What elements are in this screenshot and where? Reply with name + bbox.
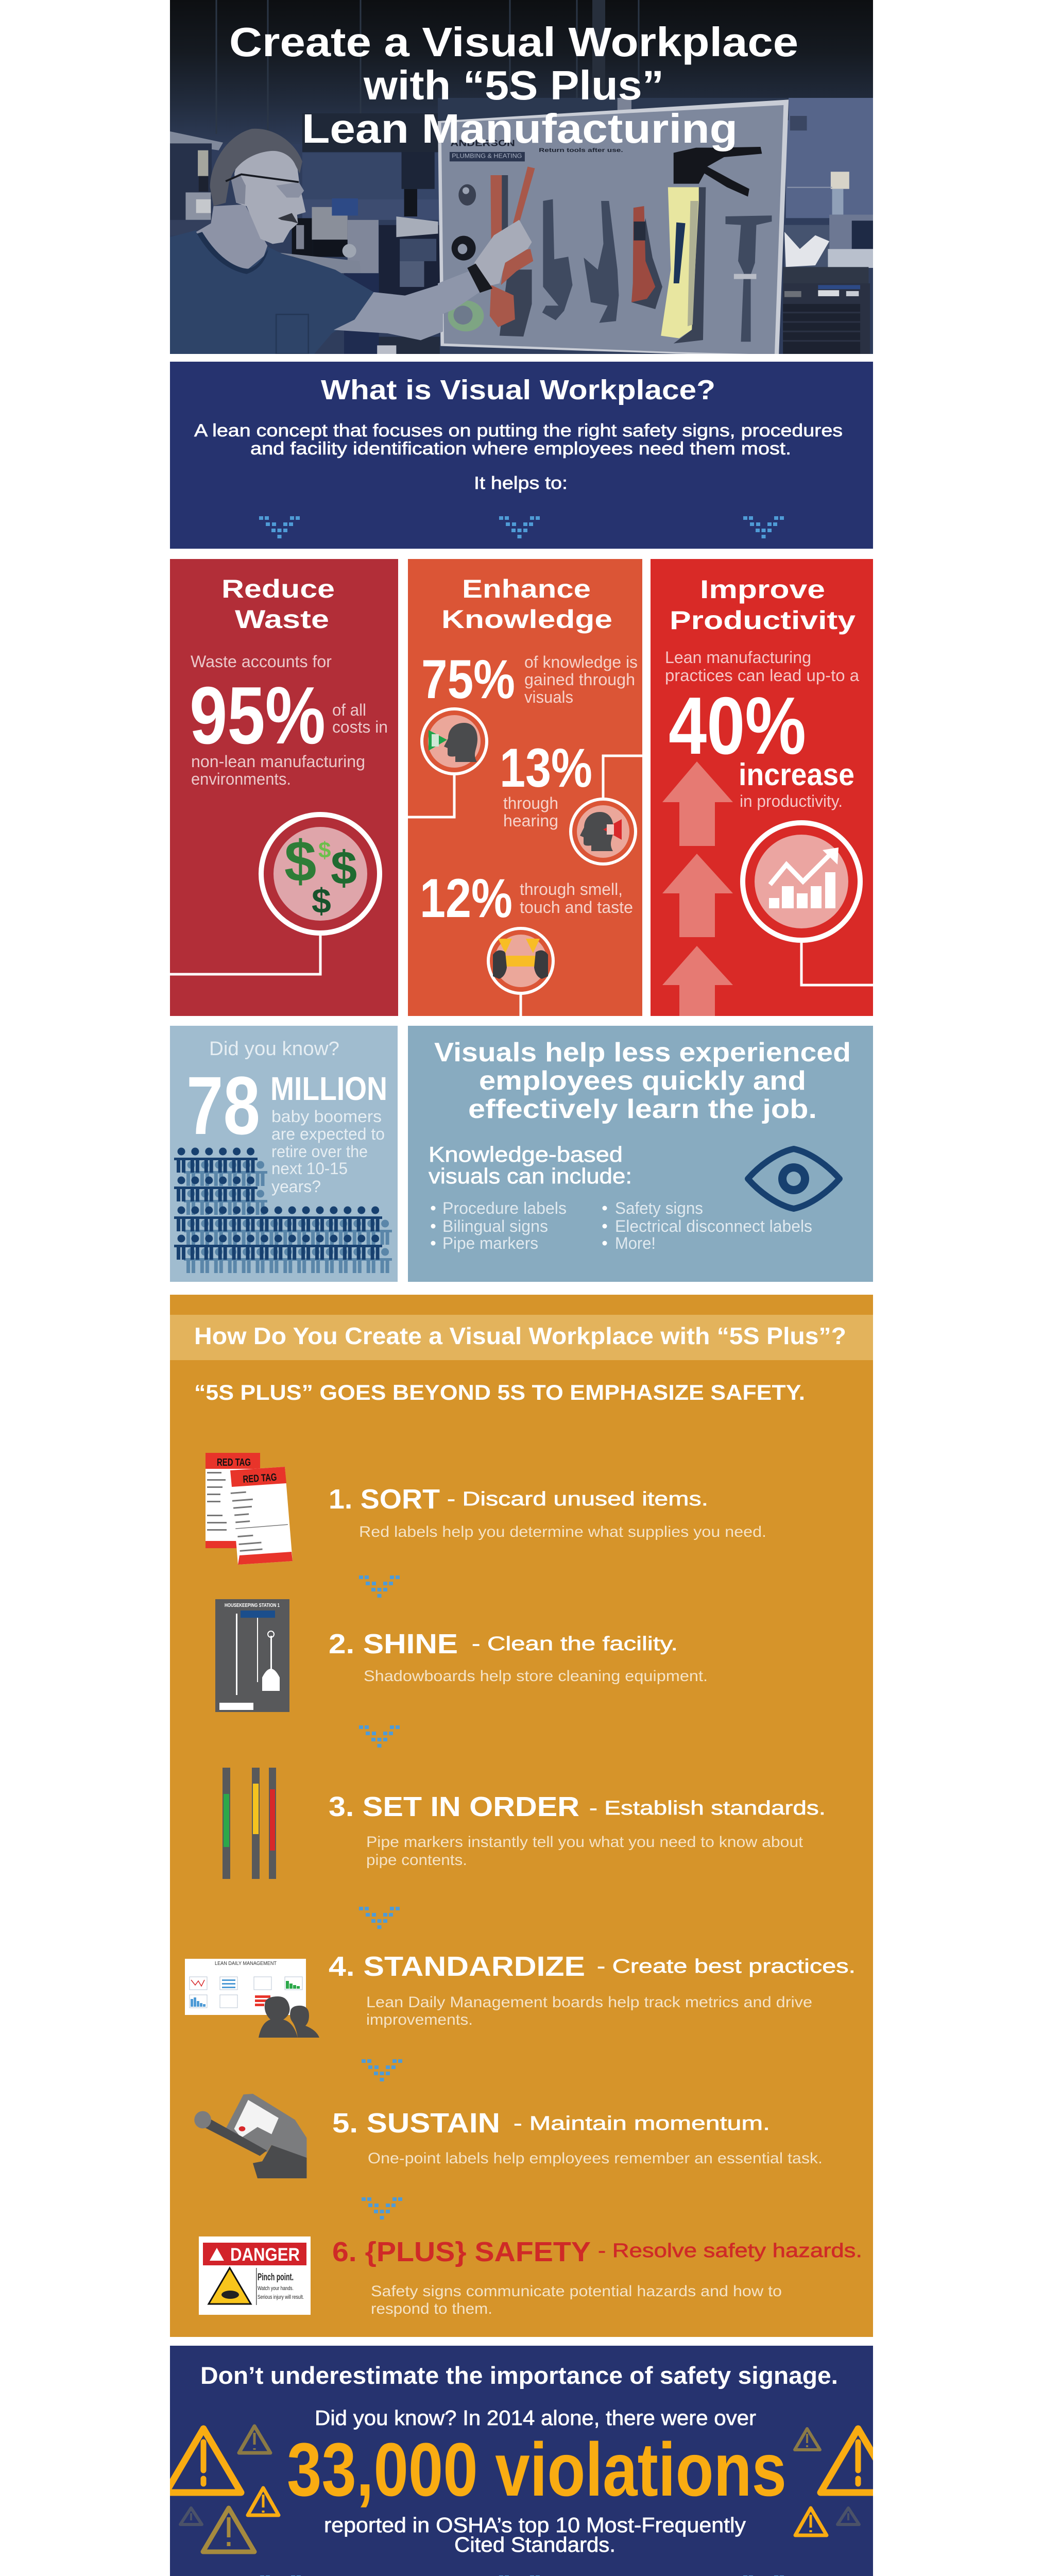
definition text: and facility identification where employees need them most. (250, 439, 791, 459)
step 4: improvements. (366, 2011, 473, 2028)
chevron (359, 1907, 400, 1929)
icon: eye (748, 1149, 840, 1209)
step 3 (329, 1791, 826, 1869)
icon: dollar signs (261, 815, 380, 933)
step 1: - Discard unused items. (447, 1488, 708, 1510)
icon: shadowboard (215, 1599, 289, 1712)
heading: Improve (700, 575, 825, 604)
heading: effectively learn the job. (468, 1094, 817, 1124)
heading band (170, 1315, 873, 1360)
step 2: Shadowboards help store cleaning equipment. (364, 1668, 708, 1685)
icon: danger sign: Pinch point. (258, 2272, 294, 2283)
step 1: 1. SORT (329, 1484, 440, 1515)
connector (170, 936, 320, 974)
icon: pipe markers (223, 1768, 276, 1879)
stat 75%: 75% (421, 648, 515, 710)
chevrons (260, 2575, 784, 2576)
icon: lean daily management board (185, 1959, 319, 2038)
bullet list: Bilingual signs (442, 1217, 548, 1235)
step 4 (329, 1951, 856, 2028)
chevron (359, 1725, 400, 1748)
waste text: environments. (191, 770, 291, 788)
step 6: respond to them. (371, 2300, 492, 2317)
shadowboard with tools: Return tools after use. (539, 147, 623, 154)
baby boomers text: next 10-15 (271, 1159, 348, 1178)
heading: What is Visual Workplace? (321, 375, 715, 405)
heading (670, 575, 856, 635)
icon: red tags (206, 1453, 293, 1565)
icon: danger sign: Watch your hands. (258, 2285, 294, 2292)
title (229, 19, 798, 151)
panel: enhance knowledge (408, 559, 642, 1016)
icon: danger sign: DANGER (230, 2245, 300, 2265)
worker (170, 129, 443, 355)
heading: Knowledge (441, 605, 612, 634)
waste text (191, 652, 388, 788)
panel: reduce waste (170, 559, 398, 1016)
icon: danger sign (199, 2236, 311, 2315)
warning triangles (166, 2426, 896, 2552)
connectors (408, 756, 642, 1016)
waste text: non-lean manufacturing (191, 752, 365, 771)
icon: dollar signs: $ (312, 882, 331, 921)
it helps to: It helps to: (474, 473, 568, 493)
heading: Don’t underestimate the importance of safety signage. (200, 2362, 838, 2389)
icon: red tags: RED TAG (217, 1457, 251, 1468)
baby boomers text: retire over the (271, 1142, 368, 1161)
stat 12%: 12% (420, 867, 512, 929)
heading band: How Do You Create a Visual Workplace with “5S Plus”? (194, 1323, 846, 1349)
heading: Waste (235, 605, 329, 634)
connector (801, 943, 873, 985)
step 3: 3. SET IN ORDER (329, 1791, 579, 1822)
productivity text (665, 648, 859, 685)
did you know text: Did you know? In 2014 alone, there were over (315, 2406, 756, 2430)
subheading: “5S PLUS” GOES BEYOND 5S TO EMPHASIZE SAFETY. (194, 1380, 805, 1404)
icon: dollar signs: $ (284, 829, 316, 893)
heading: employees quickly and (479, 1066, 806, 1096)
panel: what is visual workplace (170, 362, 873, 549)
title: with “5S Plus” (363, 62, 664, 108)
heading (434, 1038, 851, 1124)
baby boomers text (271, 1107, 385, 1196)
shadowboard with tools (438, 99, 789, 355)
subheading: visuals can include: (429, 1164, 632, 1188)
step 4: 4. STANDARDIZE (329, 1951, 585, 1982)
heading: Reduce (221, 574, 335, 603)
icon: crowd of workers (174, 1147, 392, 1273)
text 12%: touch and taste (520, 898, 633, 917)
background of workshop, left (170, 113, 441, 354)
heading: Productivity (670, 606, 856, 635)
text 13% (503, 794, 558, 830)
step 4: Lean Daily Management boards help track metrics and drive (366, 1994, 812, 2011)
panel: safety signage violations (166, 2346, 896, 2576)
photo: worker at tool shadowboard (170, 0, 876, 355)
icon: hearing (571, 799, 636, 864)
heading: Visuals help less experienced (434, 1038, 851, 1067)
panel: improve productivity (651, 559, 873, 1016)
definition text (194, 421, 843, 459)
header: photo banner (170, 0, 876, 355)
step 5: - Maintain momentum. (514, 2113, 770, 2134)
icon: dollar signs: $ (318, 838, 331, 863)
increase (739, 757, 854, 810)
heading (441, 574, 612, 634)
bullet list: Pipe markers (442, 1234, 538, 1252)
step 4: - Create best practices. (597, 1956, 856, 1977)
icon: sight (422, 709, 487, 774)
text 13%: through (503, 794, 558, 812)
subheading (429, 1142, 632, 1188)
chevron (359, 1575, 400, 1598)
osha text: reported in OSHA’s top 10 Most-Frequently (324, 2513, 746, 2537)
step 6: Safety signs communicate potential hazards and how to (371, 2283, 782, 2300)
text 75%: of knowledge is (524, 653, 638, 671)
step 6: - Resolve safety hazards. (598, 2240, 862, 2262)
step 5 (332, 2108, 823, 2167)
panel: how do you create a visual workplace (170, 1295, 873, 2337)
icon: danger sign: Serious injury will result. (258, 2294, 304, 2300)
text 12% (520, 880, 633, 917)
osha text: Cited Standards. (454, 2533, 615, 2556)
baby boomers text: years? (271, 1177, 321, 1196)
stat 95%: 95% (190, 670, 326, 761)
step 1 (329, 1484, 766, 1540)
heading (221, 574, 335, 634)
chevron (362, 2197, 402, 2219)
bullet list (431, 1199, 812, 1252)
waste text: Waste accounts for (191, 652, 332, 671)
text 75%: visuals (524, 688, 573, 706)
did you know: Did you know? (209, 1038, 339, 1060)
icon: one-point label lever (194, 2094, 306, 2178)
productivity text: practices can lead up-to a (665, 666, 859, 685)
baby boomers text: are expected to (271, 1125, 385, 1143)
step 5: One-point labels help employees remember an essential task. (368, 2150, 823, 2167)
waste text: of all (332, 701, 366, 719)
bullet list: More! (615, 1234, 656, 1252)
step 3: - Establish standards. (589, 1798, 826, 1819)
icon: shadowboard: HOUSEKEEPING STATION 1 (225, 1602, 280, 1608)
text 12%: through smell, (520, 880, 623, 899)
background of workshop, right (438, 98, 876, 355)
step 6: 6. {PLUS} SAFETY (332, 2236, 591, 2267)
bullet list: Procedure labels (442, 1199, 567, 1217)
baby boomers text: baby boomers (271, 1107, 382, 1126)
step 6 (332, 2236, 862, 2317)
step 2 (329, 1629, 708, 1685)
million: MILLION (270, 1070, 387, 1107)
increase: increase (739, 757, 854, 792)
shadowboard with tools: ANDERSON (451, 138, 515, 148)
bullet list: Electrical disconnect labels (615, 1217, 812, 1235)
stat 13%: 13% (500, 737, 592, 799)
title: Lean Manufacturing (302, 106, 738, 151)
text 75%: gained through (524, 670, 635, 689)
text 75% (524, 653, 638, 706)
chevrons (259, 516, 784, 538)
stat 33,000 violations: 33,000 violations (287, 2428, 786, 2512)
osha text (324, 2513, 746, 2556)
icon: red tags: RED TAG (243, 1471, 277, 1485)
step 5: 5. SUSTAIN (332, 2108, 500, 2139)
icon: dollar signs: $ (331, 842, 357, 894)
definition text: A lean concept that focuses on putting the right safety signs, procedures (194, 421, 843, 440)
step 1: Red labels help you determine what supplies you need. (359, 1523, 766, 1540)
icon: smell touch taste (488, 928, 553, 993)
step 2: - Clean the facility. (472, 1633, 678, 1655)
step 2: 2. SHINE (329, 1629, 458, 1659)
stat 78: 78 (186, 1059, 260, 1151)
panel: visuals help less experienced employees (408, 1026, 873, 1282)
icon: growth chart (743, 823, 860, 940)
icon: lean daily management board: LEAN DAILY MANAGEMENT (215, 1961, 277, 1967)
chevron (362, 2059, 402, 2081)
step 3: pipe contents. (366, 1852, 467, 1869)
productivity text: Lean manufacturing (665, 648, 811, 667)
waste text: costs in (332, 718, 388, 736)
subheading: Knowledge-based (429, 1142, 623, 1166)
stat 40%: 40% (669, 681, 806, 771)
increase: in productivity. (740, 792, 843, 810)
title: Create a Visual Workplace (229, 19, 798, 65)
panel: did you know 78 million (170, 1026, 398, 1282)
shadowboard with tools: PLUMBING & HEATING (452, 152, 522, 160)
bullet list: Safety signs (615, 1199, 703, 1217)
heading: Enhance (462, 574, 591, 603)
rising arrows (662, 761, 733, 1016)
step 3: Pipe markers instantly tell you what you need to know about (366, 1834, 803, 1851)
text 13%: hearing (503, 811, 558, 830)
